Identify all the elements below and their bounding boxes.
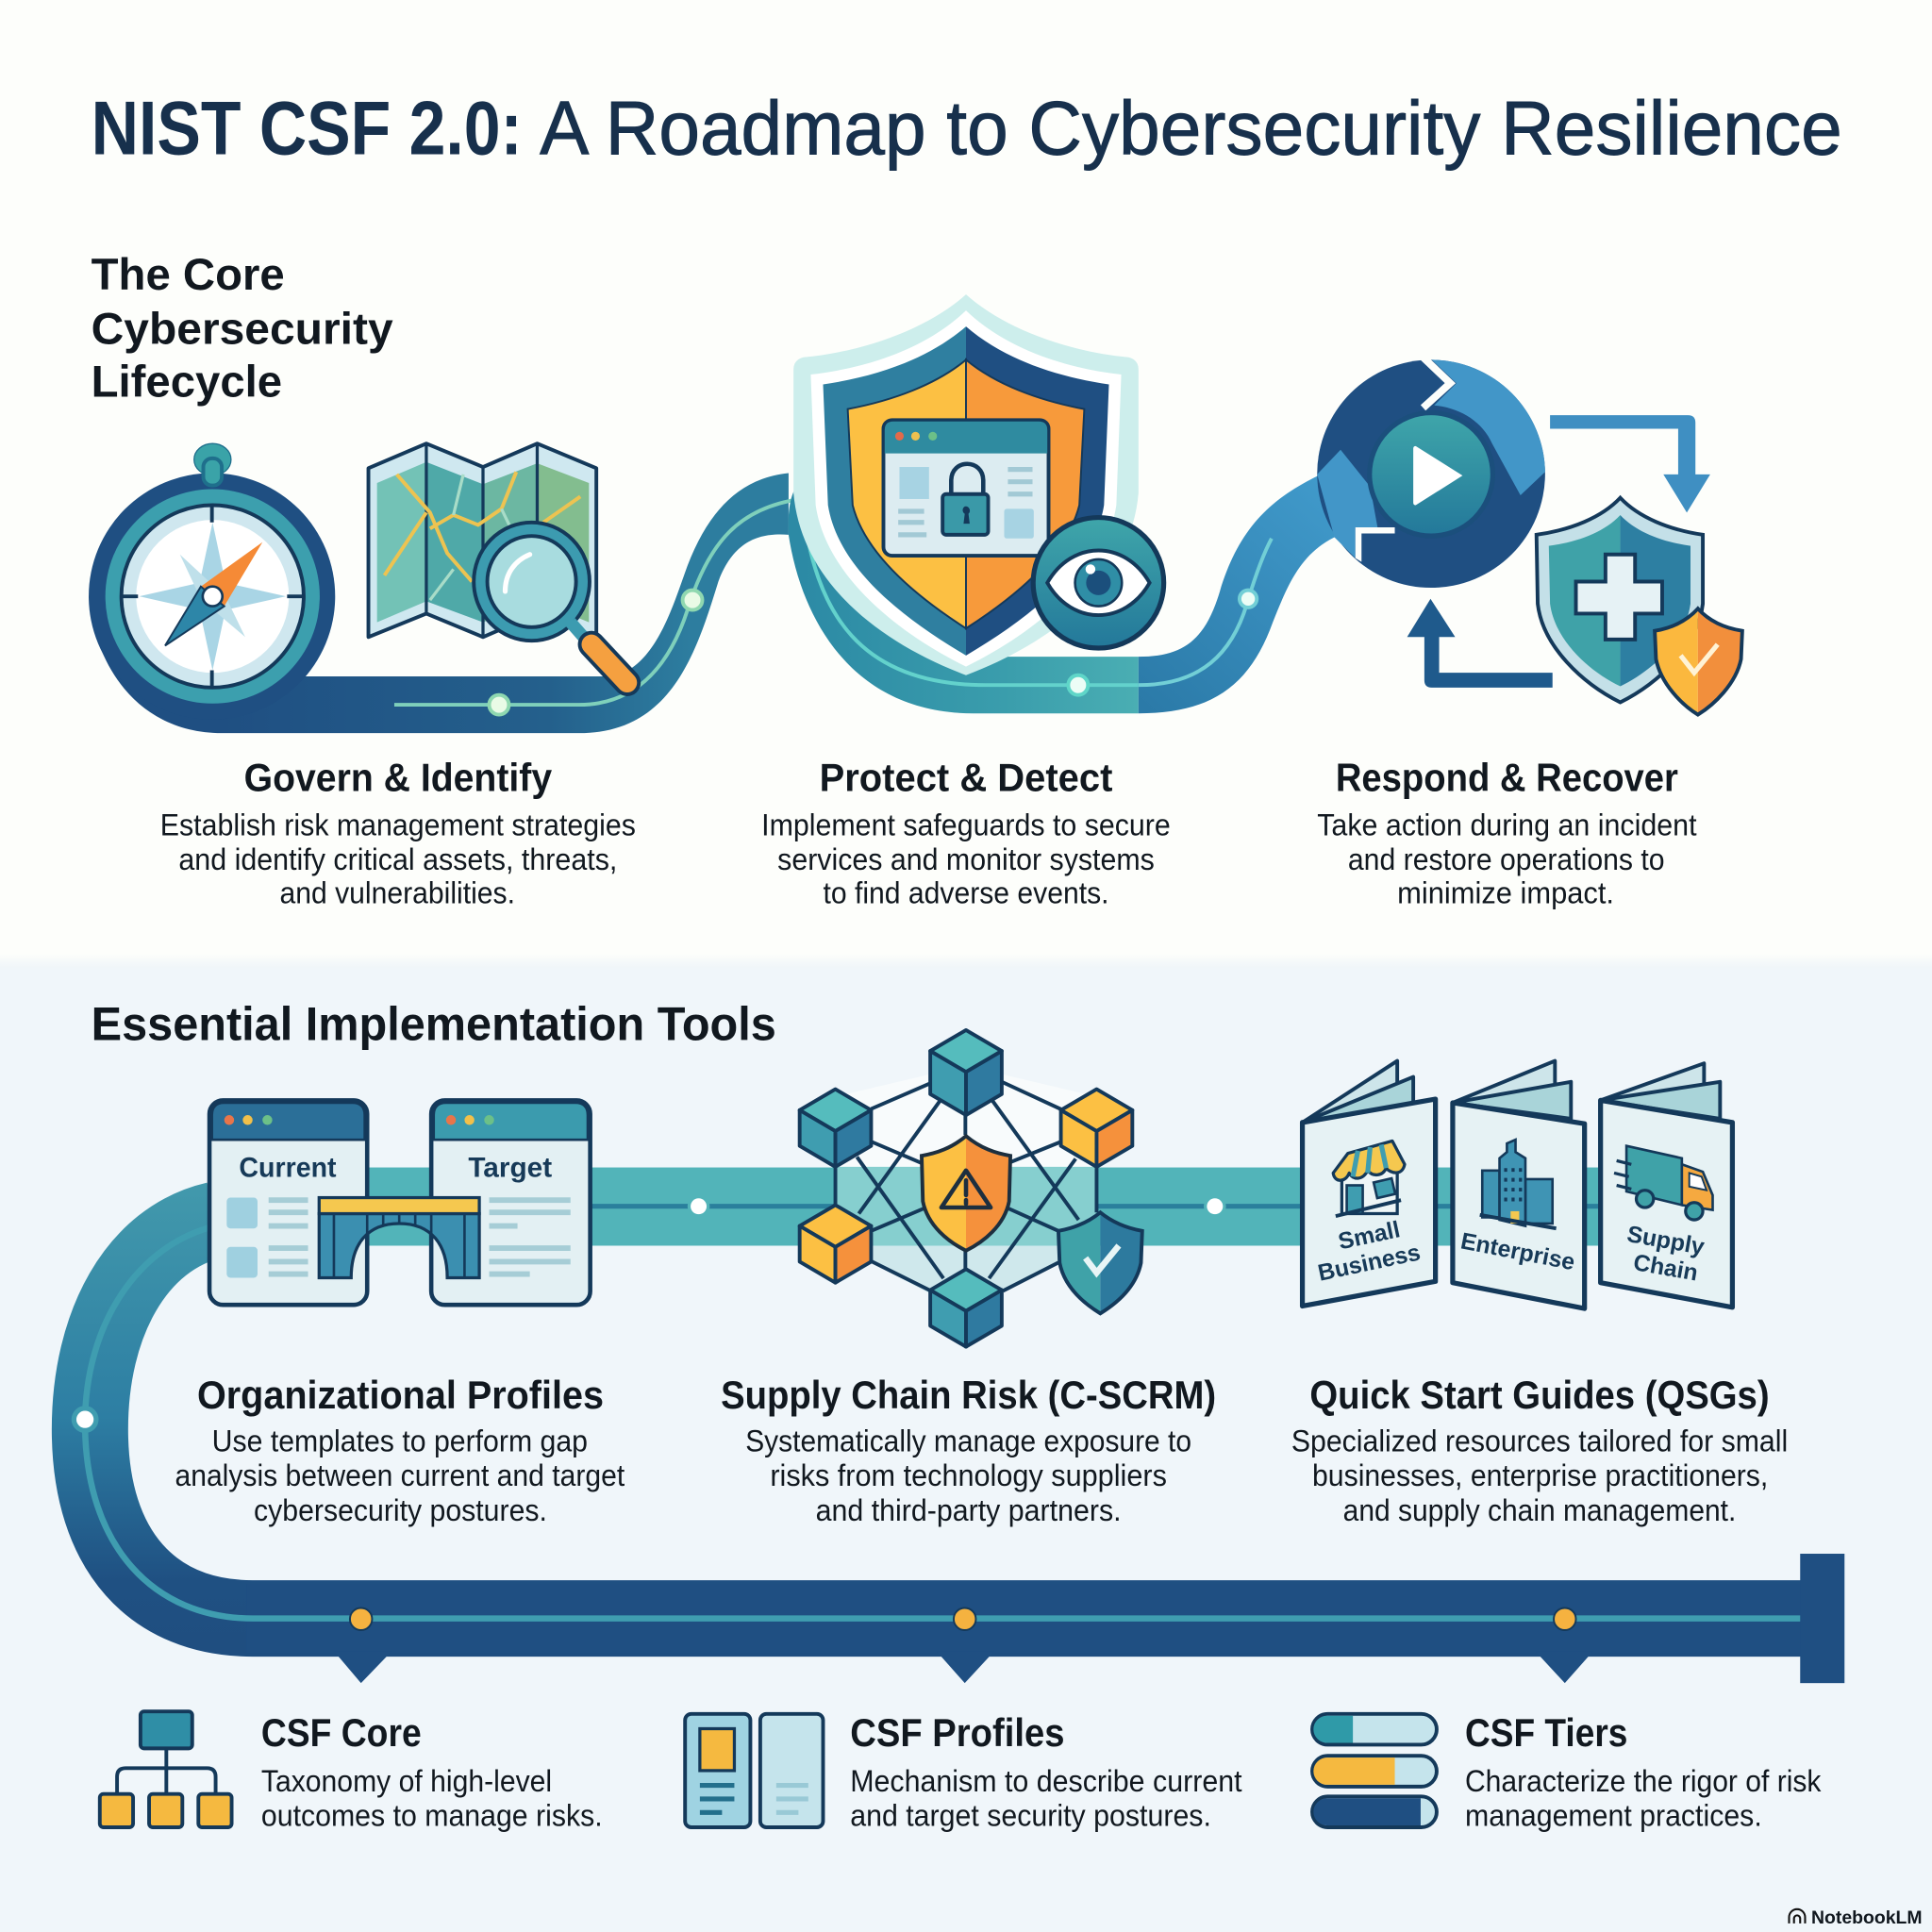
label: supply chain xyxy=(1625,1222,1707,1287)
heading: the core cybersecurity lifecycle: The Core xyxy=(92,249,285,299)
window: target: Target xyxy=(468,1152,552,1183)
cube: top xyxy=(930,1030,1002,1115)
cube: bottom xyxy=(930,1269,1002,1347)
icon: current and target profile windows with bridge xyxy=(209,1100,591,1305)
booklet: small business xyxy=(1303,1061,1436,1306)
icon: respond play cycle xyxy=(1317,358,1545,588)
center warning shield xyxy=(922,1136,1010,1251)
text block: CSF tiers: Characterize the rigor of risk xyxy=(1465,1763,1822,1798)
text block: respond and recover: minimize impact. xyxy=(1397,874,1614,909)
text block: organizational profiles: Organizational Profiles xyxy=(197,1373,604,1417)
heading: essential implementation tools: Essential Implementation Tools xyxy=(92,997,776,1050)
text block: quick start guides xyxy=(1291,1373,1788,1527)
text block: CSF profiles: and target security postures. xyxy=(850,1798,1211,1833)
text block: quick start guides: Specialized resources tailored for small xyxy=(1291,1424,1788,1458)
title: A Roadmap to Cybersecurity Resilience xyxy=(540,86,1842,171)
label: small business: Small xyxy=(1336,1217,1403,1255)
icon: folded map with magnifier xyxy=(369,443,627,683)
text block: CSF tiers: CSF Tiers xyxy=(1465,1710,1627,1755)
browser window xyxy=(883,420,1049,556)
icon: small orange check shield xyxy=(1655,608,1742,715)
watermark: NotebookLM: NotebookLM xyxy=(1811,1907,1923,1928)
roadmap track: govern to protect xyxy=(90,474,801,733)
text block: protect and detect: Implement safeguards to secure xyxy=(761,808,1171,842)
cube: upper right xyxy=(1061,1090,1132,1167)
text block: protect and detect: Protect & Detect xyxy=(820,756,1112,800)
timeline markers xyxy=(334,1607,1593,1683)
text block: govern and identify: Establish risk management strategies xyxy=(160,808,636,842)
icon: truck xyxy=(1614,1146,1713,1220)
text block: govern and identify xyxy=(160,756,636,909)
text block: govern and identify: and vulnerabilities. xyxy=(279,874,515,909)
text block: CSF profiles: Mechanism to describe current xyxy=(850,1763,1242,1798)
text block: respond and recover xyxy=(1317,756,1697,909)
text block: supply chain risk: Supply Chain Risk (C-SCRM) xyxy=(721,1373,1216,1417)
icon: store xyxy=(1333,1141,1405,1216)
check shield xyxy=(1058,1212,1142,1313)
window: current: Current xyxy=(239,1152,337,1183)
icon: eye badge xyxy=(1033,518,1164,648)
text block: organizational profiles: analysis between current and target xyxy=(175,1457,625,1492)
cube: upper left xyxy=(800,1090,871,1167)
icon: shield with browser and lock xyxy=(793,294,1139,675)
icon: compass xyxy=(89,443,335,720)
label: small business xyxy=(1316,1217,1423,1287)
icon: tier pills for CSF tiers xyxy=(1312,1714,1437,1827)
text block: supply chain risk xyxy=(721,1373,1216,1527)
icon: quick start guide booklets xyxy=(1303,1061,1732,1308)
roadmap track: under shield xyxy=(789,474,1139,713)
text block: CSF profiles: CSF Profiles xyxy=(850,1710,1064,1755)
text block: protect and detect xyxy=(761,756,1171,909)
text block: CSF core xyxy=(261,1710,603,1833)
icon: recovery shield with cross xyxy=(1537,498,1742,715)
bridge xyxy=(319,1198,479,1277)
heading: the core cybersecurity lifecycle xyxy=(92,249,393,407)
panel: essential implementation tools xyxy=(74,997,1844,1833)
label: enterprise: Enterprise xyxy=(1458,1228,1577,1275)
background: lifecycle section xyxy=(0,0,1932,958)
roadmap band: curve into bottom timeline xyxy=(74,1220,1811,1619)
arrow: response to recovery xyxy=(1550,415,1710,512)
heading: the core cybersecurity lifecycle: Cybersecurity xyxy=(92,303,393,353)
window: target xyxy=(431,1100,591,1305)
text block: quick start guides: Quick Start Guides (QSGs) xyxy=(1309,1373,1770,1417)
text block: protect and detect: services and monitor systems xyxy=(777,841,1155,876)
text block: supply chain risk: risks from technology suppliers xyxy=(770,1457,1167,1492)
label: supply chain: Chain xyxy=(1631,1250,1700,1287)
text block: govern and identify: Govern & Identify xyxy=(244,756,553,800)
text block: CSF tiers xyxy=(1465,1710,1822,1833)
text block: supply chain risk: Systematically manage exposure to xyxy=(745,1424,1191,1458)
icon: profile panels for CSF profiles xyxy=(685,1714,823,1827)
arrow: recovery to response xyxy=(1407,599,1553,688)
text block: govern and identify: and identify critical assets, threats, xyxy=(178,841,617,876)
icon: building xyxy=(1480,1140,1557,1228)
text block: CSF profiles xyxy=(850,1710,1242,1833)
text block: respond and recover: Respond & Recover xyxy=(1336,756,1678,800)
heading: the core cybersecurity lifecycle: Lifecycle xyxy=(92,357,282,407)
text block: CSF tiers: management practices. xyxy=(1465,1798,1762,1833)
panel: core cybersecurity lifecycle xyxy=(89,249,1742,909)
text block: CSF core: CSF Core xyxy=(261,1710,422,1755)
icon: hierarchy for CSF core xyxy=(100,1711,232,1827)
text block: organizational profiles xyxy=(175,1373,625,1527)
timeline end cap xyxy=(1800,1554,1844,1683)
text block: CSF core: outcomes to manage risks. xyxy=(261,1798,603,1833)
roadmap track: detect to respond xyxy=(1139,475,1343,713)
title: NIST CSF 2.0: xyxy=(92,86,523,171)
text block: respond and recover: and restore operations to xyxy=(1348,841,1665,876)
text block: quick start guides: businesses, enterprise practitioners, xyxy=(1312,1457,1768,1492)
label: small business: Business xyxy=(1316,1240,1423,1287)
lock xyxy=(942,464,989,535)
icon: supply chain network xyxy=(800,1030,1142,1347)
roadmap band: teal horizontal xyxy=(209,1168,1731,1245)
booklet: enterprise xyxy=(1453,1061,1585,1308)
label: supply chain: Supply xyxy=(1625,1222,1707,1260)
cube: lower left xyxy=(800,1205,871,1283)
text block: protect and detect: to find adverse events. xyxy=(823,874,1109,909)
text block: supply chain risk: and third-party partners. xyxy=(816,1492,1122,1527)
booklet: supply chain xyxy=(1601,1063,1732,1307)
background: tools section xyxy=(0,958,1932,1932)
text block: quick start guides: and supply chain management. xyxy=(1343,1492,1736,1527)
text block: respond and recover: Take action during an incident xyxy=(1317,808,1697,842)
text block: organizational profiles: cybersecurity postures. xyxy=(254,1492,547,1527)
text block: CSF core: Taxonomy of high-level xyxy=(261,1763,552,1798)
window: current xyxy=(209,1100,367,1305)
text block: organizational profiles: Use templates to perform gap xyxy=(212,1424,588,1458)
